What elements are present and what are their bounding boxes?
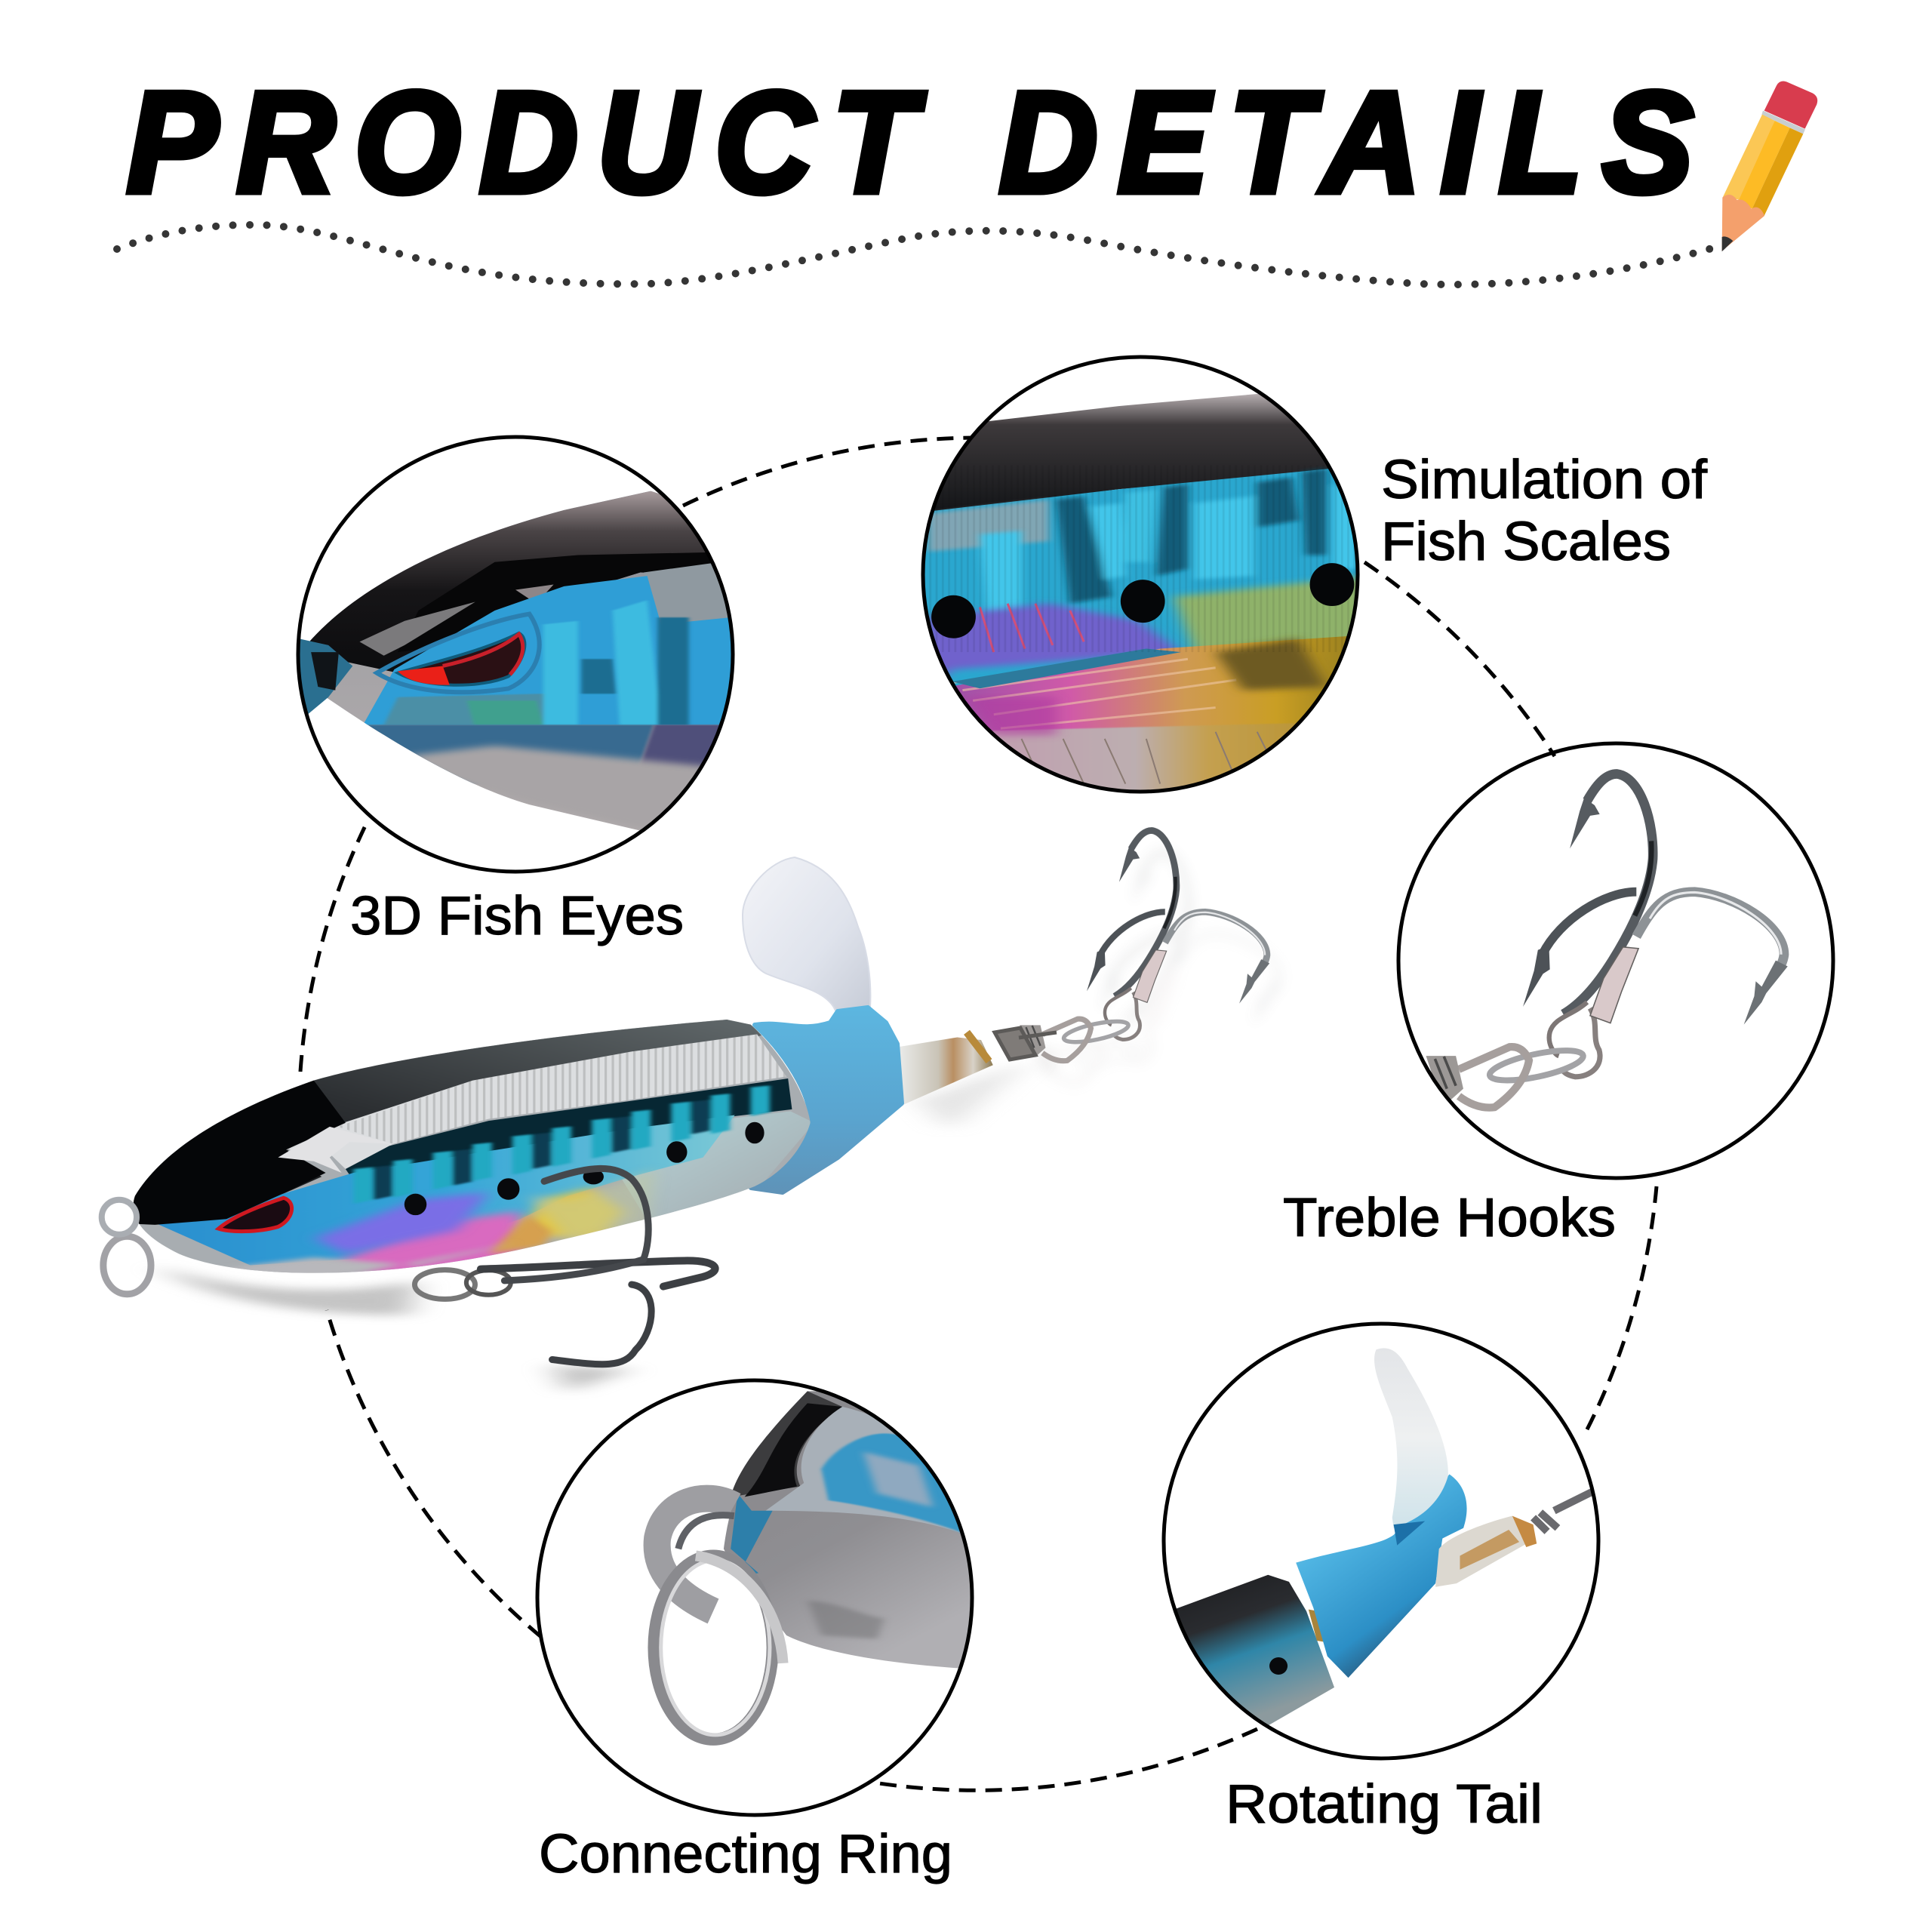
lure nose (724, 1391, 989, 1670)
panel: 3D fish eyes lens (287, 434, 744, 946)
belly (992, 723, 1296, 789)
cyan bars (353, 1085, 770, 1204)
eye socket blue rim (377, 614, 540, 692)
silver band (282, 1034, 786, 1169)
metal tube (894, 1032, 993, 1106)
lens image: fish eye close-up (300, 491, 731, 830)
rear silver flank (616, 1111, 814, 1221)
label: Treble Hooks (1283, 1188, 1616, 1248)
brass cap (1512, 1516, 1537, 1547)
lure back (133, 1020, 762, 1203)
blue body (155, 1115, 735, 1266)
icon: pencil (1722, 82, 1817, 251)
brass pin (1309, 1610, 1327, 1642)
split ring (654, 1555, 773, 1740)
title: DETAILS (999, 63, 1694, 223)
nose black (115, 1081, 346, 1225)
lure shadow (155, 1061, 1029, 1392)
blue collar (751, 1008, 902, 1192)
panel: fish scales lens (911, 354, 1708, 794)
vertical bands (980, 469, 1358, 614)
label: Simulation of (1381, 450, 1708, 510)
label: Rotating Tail (1226, 1774, 1543, 1835)
lens image: rotating tail close-up (1160, 1348, 1596, 1725)
lens ring (1164, 1324, 1598, 1758)
lure body (102, 1015, 830, 1364)
clear spinner (1374, 1348, 1448, 1528)
title: PRODUCT (127, 63, 925, 223)
screw eye (657, 1499, 734, 1611)
top treble hook (1020, 830, 1281, 1083)
tube (1435, 1516, 1530, 1587)
swivel wire (1534, 1490, 1596, 1531)
title (127, 63, 1694, 223)
lens image: treble hook close-up (1426, 774, 1788, 1108)
front ring (102, 1200, 151, 1294)
blue collar (1296, 1475, 1467, 1678)
dark stripe band (346, 1078, 792, 1180)
label: Connecting Ring (539, 1824, 952, 1884)
panel: treble hooks lens (1283, 743, 1833, 1248)
dotted wavy underline (117, 225, 1715, 285)
lens ring (298, 437, 733, 872)
lateral dots (405, 1122, 764, 1215)
main lure product (102, 830, 1281, 1392)
iridescent lower belly (337, 1211, 520, 1284)
lens ring (537, 1380, 972, 1815)
clear spinner blade (743, 857, 870, 1015)
panel: rotating tail lens (1160, 1324, 1598, 1835)
fin fan (955, 636, 1346, 731)
swivel coil (995, 1028, 1057, 1060)
body cylinder (1160, 1575, 1334, 1725)
lens image: connecting ring close-up (654, 1391, 989, 1740)
scale texture (924, 465, 1361, 652)
panel: connecting ring lens (537, 1380, 989, 1884)
nose eyelet stub (297, 638, 352, 715)
lure eye (218, 1198, 292, 1232)
blue wrap (731, 1494, 773, 1577)
lateral dots (931, 595, 976, 638)
lens image: scales close-up (925, 394, 1355, 789)
head highlight (278, 1126, 341, 1173)
red eye (398, 633, 525, 685)
lens ring (923, 357, 1358, 792)
purple left and green right (928, 601, 1183, 678)
label: 3D Fish Eyes (350, 886, 684, 946)
label second line: Fish Scales (1381, 512, 1671, 572)
belly treble hook (414, 1168, 715, 1364)
lens ring (1398, 743, 1833, 1178)
dashed connector ring (300, 438, 1657, 1790)
scale highlight (644, 562, 731, 624)
grey top-left streaks (928, 500, 1049, 552)
